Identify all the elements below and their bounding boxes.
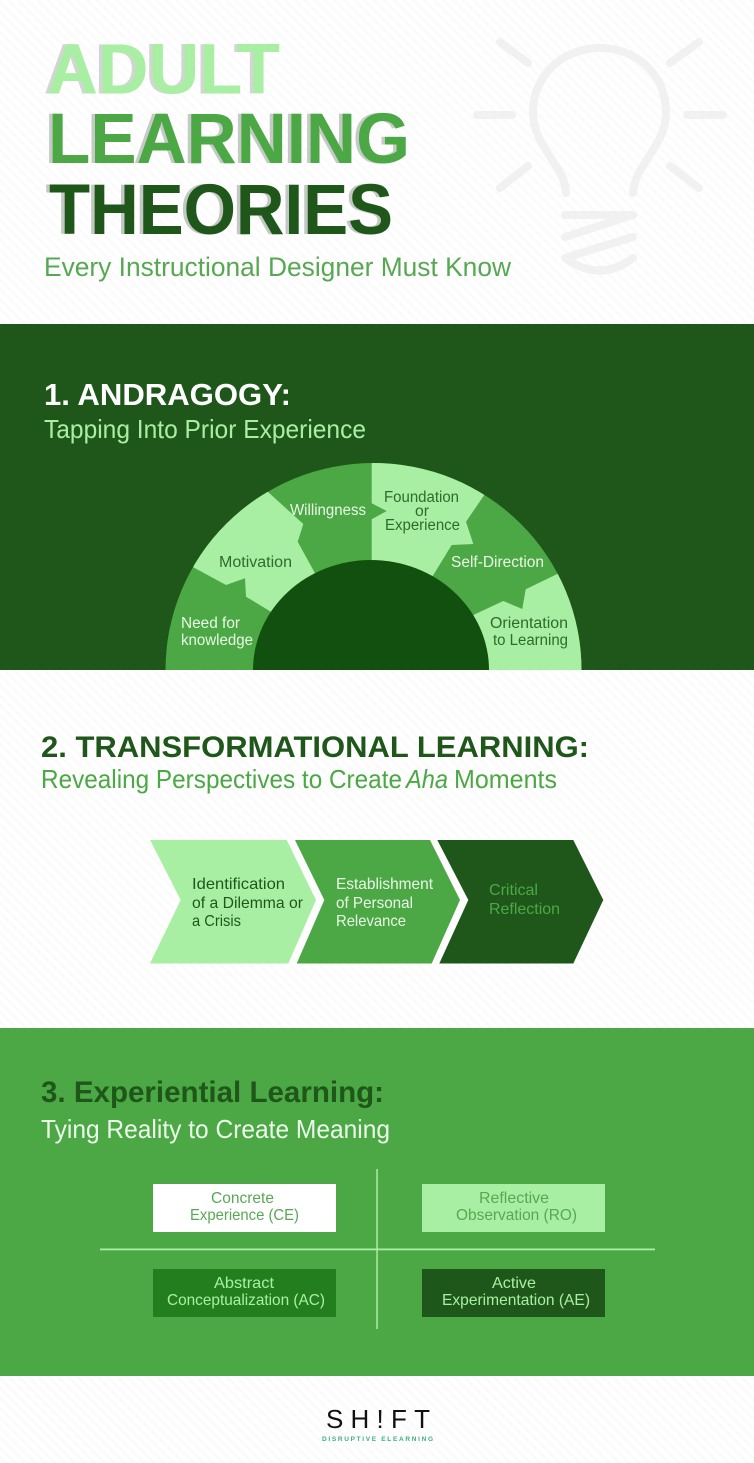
label: orientation to learning: Orientation bbox=[490, 615, 568, 632]
subheading: transformational learning: Moments bbox=[454, 764, 557, 794]
label: need for knowledge bbox=[181, 615, 253, 649]
subheading: andragogy: Tapping Into Prior Experience bbox=[44, 414, 366, 444]
box: reflective observation bbox=[422, 1184, 605, 1232]
box: abstract conceptualization: Abstract bbox=[214, 1275, 275, 1292]
logo: shift disruptive elearning: DISRUPTIVE ELEARNING bbox=[322, 1436, 433, 1443]
chevron: critical reflection: Critical bbox=[489, 882, 538, 899]
chevron: establishment of personal relevance: Establishment bbox=[336, 876, 434, 893]
title: THEORIES bbox=[46, 171, 390, 250]
chart: semicircle of six principles bbox=[166, 463, 582, 670]
label: motivation: Motivation bbox=[219, 554, 292, 571]
box: abstract conceptualization bbox=[153, 1269, 336, 1317]
box: reflective observation: Reflective bbox=[479, 1190, 549, 1207]
label: foundation or experience: Experience bbox=[385, 517, 460, 534]
chevron: establishment of personal relevance: Relevance bbox=[336, 913, 406, 930]
box: concrete experience: Experience (CE) bbox=[190, 1207, 299, 1224]
label: orientation to learning bbox=[490, 615, 568, 649]
label: foundation or experience bbox=[384, 489, 460, 534]
title: ADULT bbox=[44, 30, 276, 110]
title bbox=[44, 30, 410, 250]
logo: shift disruptive elearning: SH!FT bbox=[326, 1404, 430, 1434]
title: LEARNING bbox=[48, 100, 410, 179]
inner dome bbox=[253, 560, 489, 670]
box: concrete experience: Concrete bbox=[211, 1190, 274, 1207]
chevron: critical reflection: Reflection bbox=[489, 901, 560, 918]
panel: andragogy bbox=[0, 324, 754, 670]
box: abstract conceptualization: Conceptualization (AC) bbox=[167, 1292, 325, 1309]
heading: transformational learning: 2. TRANSFORMATIONAL LEARNING: bbox=[41, 731, 589, 764]
box: active experimentation: Experimentation (AE) bbox=[442, 1292, 590, 1309]
chevron: critical reflection bbox=[437, 840, 603, 964]
label: need for knowledge: knowledge bbox=[181, 632, 253, 649]
title: THEORIES bbox=[49, 171, 393, 250]
chevron: establishment of personal relevance: of Personal bbox=[336, 895, 413, 912]
panel: transformational learning bbox=[41, 731, 603, 964]
label: foundation or experience: or bbox=[415, 503, 429, 520]
chevron: establishment of personal relevance bbox=[295, 840, 460, 964]
heading: experiential learning: 3. Experiential Learning: bbox=[41, 1076, 384, 1109]
label: need for knowledge: Need for bbox=[181, 615, 240, 632]
heading: andragogy: 1. ANDRAGOGY: bbox=[44, 377, 291, 412]
chevron: identification of a dilemma: of a Dilemma or bbox=[192, 895, 304, 912]
chevron: identification of a dilemma: a Crisis bbox=[192, 913, 241, 930]
subheading: transformational learning: Revealing Perspectives to Create bbox=[41, 764, 402, 794]
title: ADULT bbox=[47, 30, 280, 110]
vertical axis bbox=[376, 1169, 378, 1329]
chevron: identification of a dilemma bbox=[150, 840, 316, 964]
label: willingness: Willingness bbox=[290, 502, 366, 519]
label: orientation to learning: to Learning bbox=[493, 632, 568, 649]
icon: light bulb bbox=[477, 42, 723, 270]
subheading: experiential learning: Tying Reality to Create Meaning bbox=[41, 1114, 390, 1144]
header section bbox=[44, 30, 723, 282]
box: active experimentation: Active bbox=[492, 1275, 536, 1292]
title: LEARNING bbox=[44, 100, 406, 179]
horizontal axis bbox=[100, 1248, 655, 1250]
box: concrete experience bbox=[153, 1184, 336, 1232]
label: foundation or experience: Foundation bbox=[384, 489, 459, 506]
panel: experiential learning bbox=[0, 1028, 754, 1376]
subheading: transformational learning: Aha bbox=[404, 764, 448, 794]
chevron: identification of a dilemma: Identification bbox=[192, 876, 285, 893]
box: active experimentation bbox=[422, 1269, 605, 1317]
subtitle: Every Instructional Designer Must Know bbox=[44, 252, 511, 282]
label: self-direction: Self-Direction bbox=[451, 554, 544, 571]
box: reflective observation: Observation (RO) bbox=[456, 1207, 577, 1224]
